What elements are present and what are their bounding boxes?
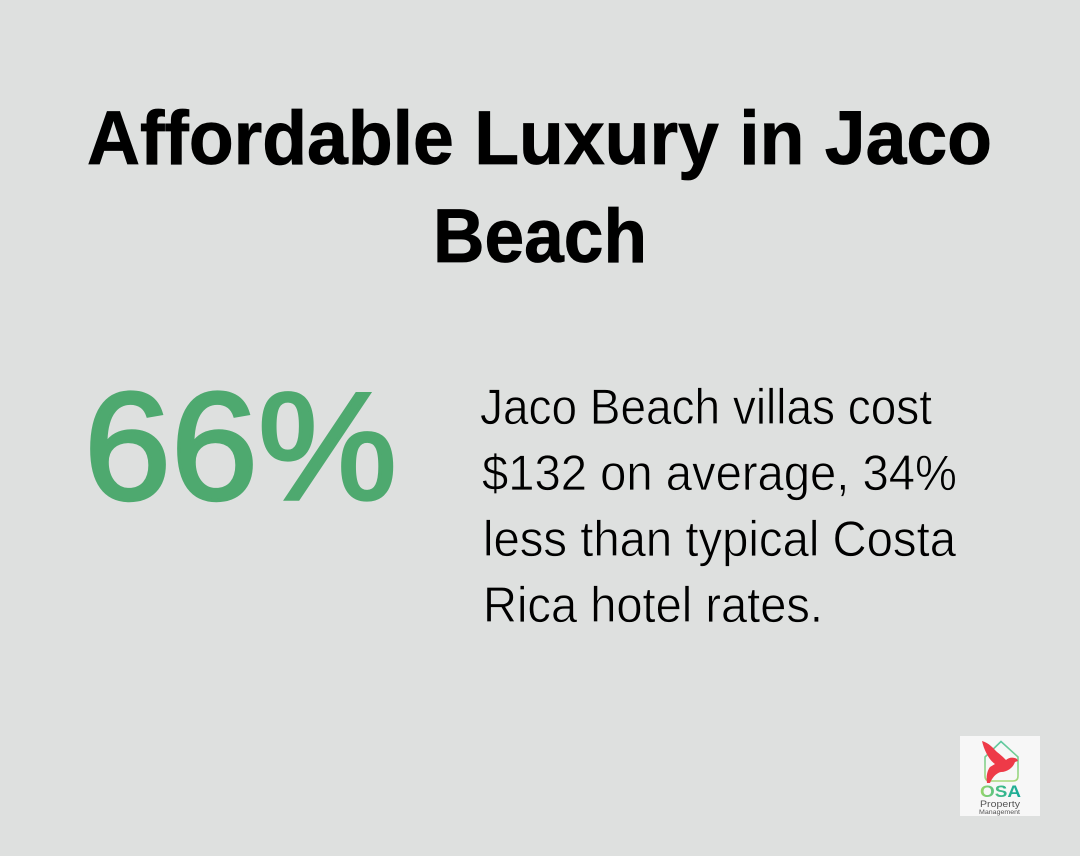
description text: less than typical Costa <box>483 511 956 567</box>
description text: Rica hotel rates. <box>483 577 823 633</box>
description text: Jaco Beach villas cost <box>480 379 932 435</box>
title: Beach <box>433 194 647 279</box>
logo wordmark: OSA <box>980 782 1021 801</box>
big stat: 66%: 66% <box>84 361 397 532</box>
title <box>87 96 992 279</box>
description text: $132 on average, 34% <box>482 445 957 501</box>
description text <box>480 379 957 633</box>
title: Affordable Luxury in Jaco <box>87 96 992 181</box>
logo subtitle: Property <box>980 799 1020 810</box>
icon: red bird <box>982 741 1018 783</box>
icon: house outline <box>985 742 1018 781</box>
logo: OSA Property Management <box>960 736 1040 816</box>
logo subtitle 2: Management <box>979 810 1020 816</box>
